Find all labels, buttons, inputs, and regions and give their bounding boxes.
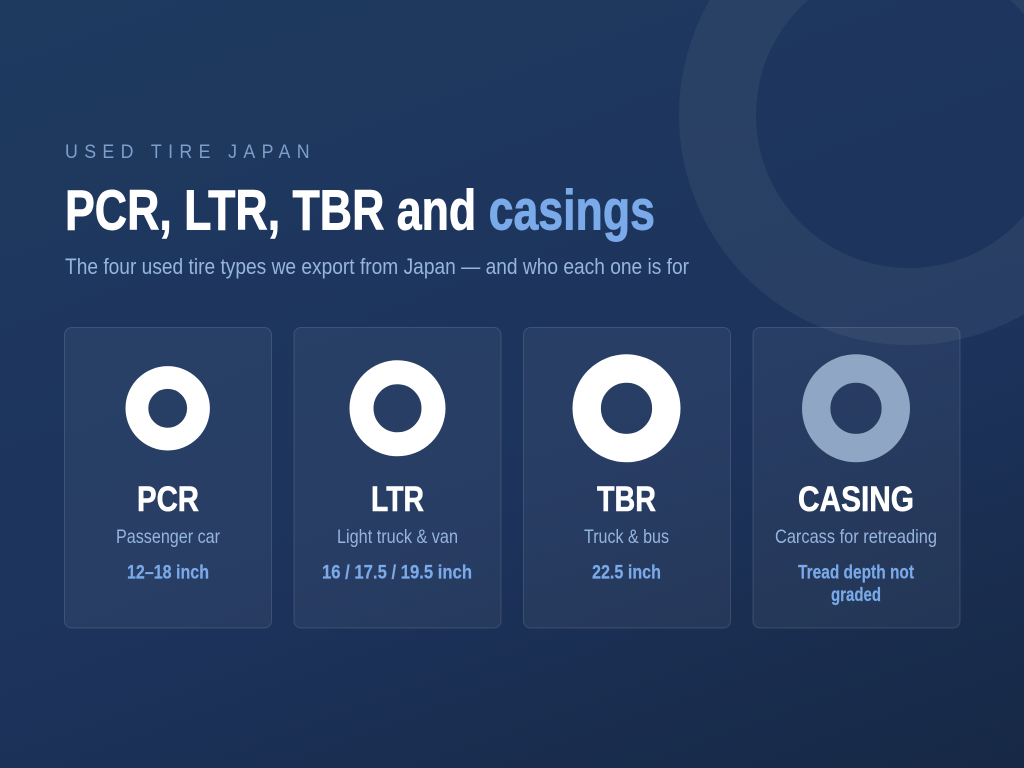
icon: PCR tire bbox=[137, 378, 198, 439]
panel: CASING bbox=[753, 328, 960, 628]
icon: casing bbox=[816, 368, 896, 448]
TBR use: Truck & bus bbox=[584, 526, 669, 548]
eyebrow: USED TIRE JAPAN bbox=[65, 141, 316, 163]
PCR size: 12–18 inch bbox=[127, 562, 209, 584]
LTR size: 16 / 17.5 / 19.5 inch bbox=[322, 562, 472, 584]
subtitle: The four used tire types we export from Japan — and who each one is for bbox=[65, 254, 689, 279]
panel: PCR bbox=[64, 328, 272, 628]
PCR label: PCR bbox=[137, 479, 199, 519]
CASING note: graded bbox=[831, 584, 881, 606]
LTR label: LTR bbox=[371, 479, 424, 519]
decorative ring bbox=[718, 0, 1024, 306]
title: PCR, LTR, TBR and casings bbox=[65, 178, 655, 242]
LTR use: Light truck & van bbox=[337, 526, 458, 548]
CASING note bbox=[798, 562, 914, 606]
CASING label: CASING bbox=[798, 479, 914, 519]
TBR label: TBR bbox=[597, 479, 656, 519]
panel: LTR bbox=[294, 328, 501, 628]
CASING use: Carcass for retreading bbox=[775, 526, 937, 548]
PCR use: Passenger car bbox=[116, 526, 220, 548]
CASING note: Tread depth not bbox=[798, 562, 914, 584]
icon: LTR tire bbox=[362, 372, 434, 444]
panel: TBR bbox=[524, 328, 730, 628]
header bbox=[65, 141, 689, 279]
icon: TBR tire bbox=[587, 368, 666, 448]
TBR size: 22.5 inch bbox=[592, 562, 661, 584]
